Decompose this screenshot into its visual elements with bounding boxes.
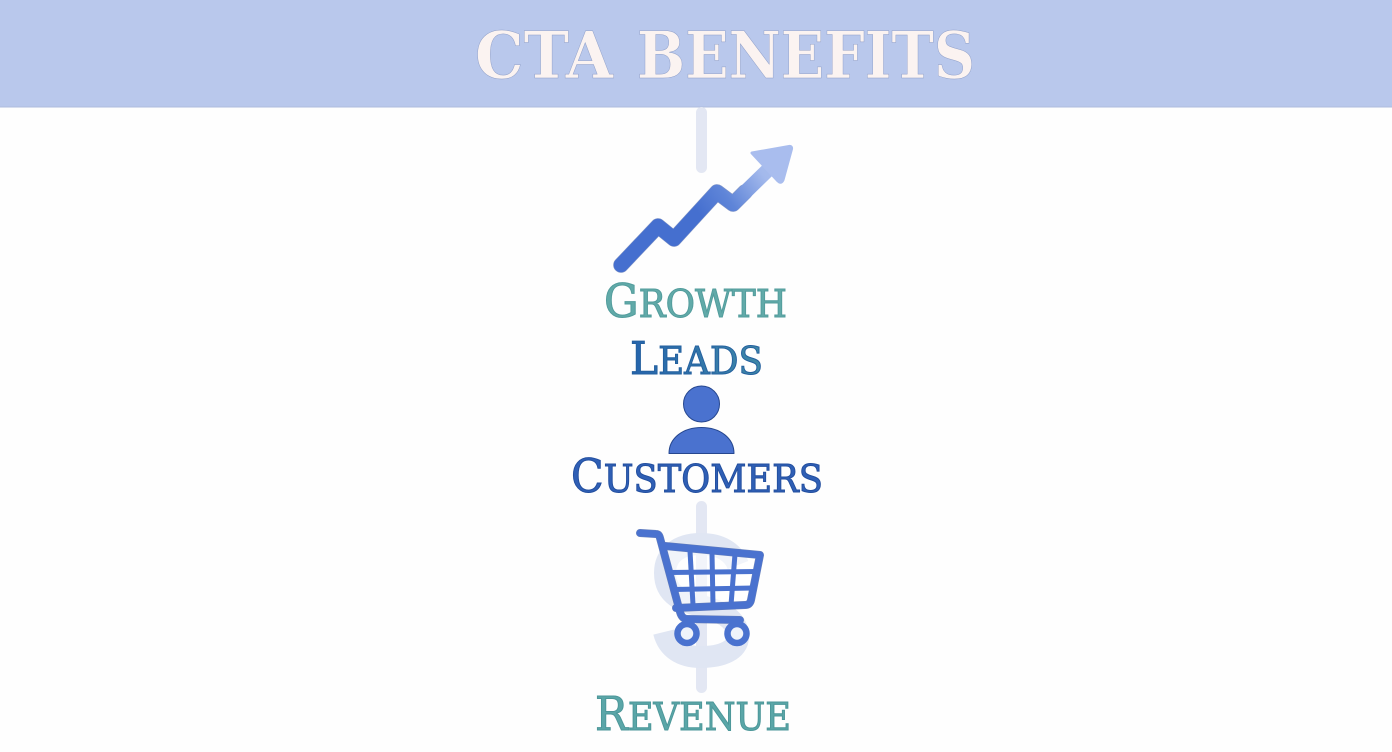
title — [475, 18, 975, 94]
label: growth: GROWTH — [604, 274, 787, 328]
icon: growth arrow — [621, 146, 792, 265]
label: customers: CUSTOMERS — [571, 449, 823, 503]
title: BENEFITS — [637, 18, 975, 94]
label: revenue: REVENUE — [595, 687, 791, 742]
icon: shopping cart — [640, 533, 760, 643]
cart wheels — [678, 624, 746, 643]
title: CTA — [475, 18, 614, 94]
cart basket grid — [670, 551, 757, 605]
label: leads: LEADS — [630, 332, 763, 385]
header band — [0, 0, 1392, 108]
cart basket cell tint — [667, 549, 758, 604]
icon: person — [669, 386, 734, 454]
connector: header to growth — [696, 107, 707, 173]
icon: faint dollar sign with connector — [664, 501, 738, 693]
